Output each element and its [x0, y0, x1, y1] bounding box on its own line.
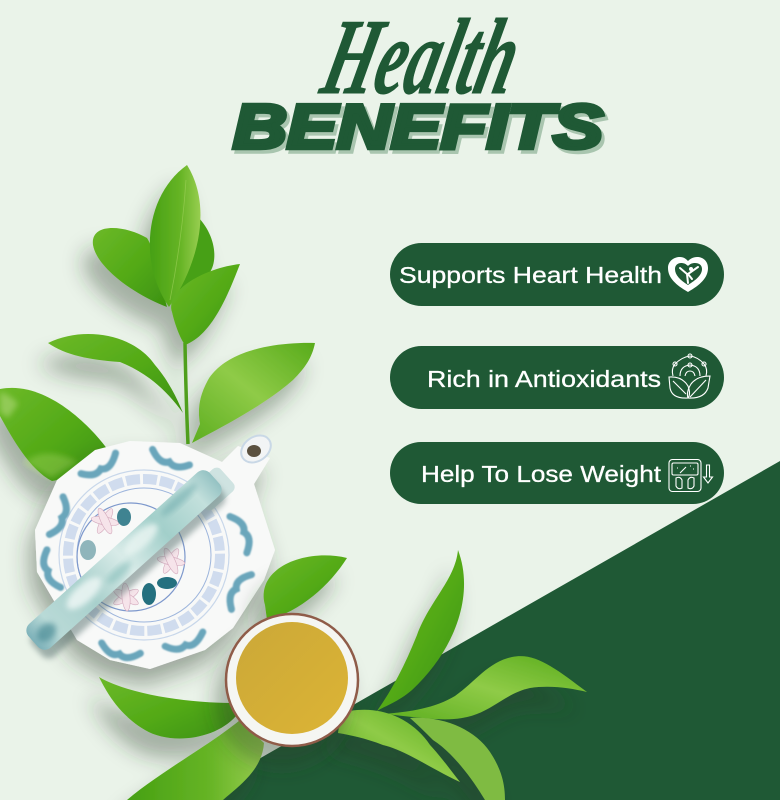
teapot body [35, 441, 275, 669]
title script line: Health: Health [311, 0, 532, 117]
title [233, 0, 606, 166]
leaves around the cup [99, 550, 587, 800]
benefit pill: lose weight [390, 442, 724, 504]
pill background [390, 346, 724, 409]
leaf: upper left [93, 228, 167, 307]
pill label: Help To Lose Weight [421, 461, 662, 487]
leaf: back right [177, 217, 214, 296]
tea cup [226, 614, 358, 746]
dark green diagonal panel [187, 461, 780, 800]
bat motifs [39, 449, 254, 661]
lid handle lug [189, 465, 237, 513]
benefit pill: antioxidants [390, 346, 724, 409]
leaf: middle right [192, 343, 315, 443]
leaf: far right [383, 656, 587, 719]
tea surface [236, 622, 348, 734]
benefit pill: heart health [390, 243, 724, 306]
title bold line: BENEFITS: BENEFITS [233, 93, 603, 162]
teapot spout opening [236, 430, 276, 468]
leaf: tall centre [150, 165, 200, 307]
plant sprig above the teapot [48, 165, 315, 444]
leaf: bottom right [410, 718, 505, 800]
title shadow line: BENEFITS [236, 96, 606, 166]
pill label: Rich in Antioxidants [427, 366, 661, 392]
leaf: lower right [171, 264, 240, 345]
lid handle [20, 466, 231, 662]
leaf: below right [338, 710, 460, 782]
icon: heart with figure [668, 257, 708, 292]
cup rim and bowl [226, 614, 358, 746]
icon: scale and down arrow [669, 460, 712, 492]
pill background [390, 442, 724, 504]
leaf: left of cup [99, 677, 236, 738]
teapot [20, 430, 276, 669]
pill label: Supports Heart Health [399, 262, 662, 288]
leaf: middle left [48, 334, 183, 413]
icon: molecules and leaves [669, 354, 710, 398]
pill background [390, 243, 724, 306]
stem [185, 343, 188, 444]
leaf: far left behind teapot [0, 388, 108, 481]
lid rings and greek key pattern [59, 470, 229, 640]
leaf: tall right [377, 550, 464, 711]
flowers and teal buds [80, 507, 185, 611]
leaf: lower left [127, 720, 264, 800]
leaf: above cup [264, 555, 347, 620]
